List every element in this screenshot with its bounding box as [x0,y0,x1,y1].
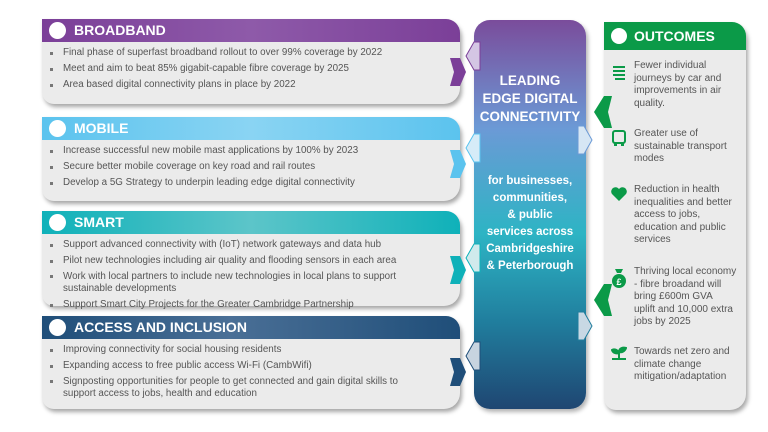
text: outcome 5: climate change [634,358,701,370]
text: outcome 1: journeys by car and [634,72,721,84]
text: outcome 4: - fibre broadand will [634,278,721,290]
heading: mobile [42,117,460,140]
panel: access and inclusion [42,316,460,409]
heading: outcomes: OUTCOMES [634,28,715,44]
text: mobile bullets: Increase successful new mobile mast applications by 100% by 2023 [63,145,358,156]
text: smart bullets: Support Smart City Projects for the Greater Cambridge Partnership [63,299,354,310]
text: broadband bullets: Meet and aim to beat 85% gigabit-capable fibre coverage by 2025 [63,63,349,74]
text: outcome 5 [634,346,730,382]
heading: access and inclusion [42,316,460,339]
text: broadband bullets: Final phase of superfast broadband rollout to over 99% coverage by 2022 [63,47,382,58]
arrows: left panels to center [450,42,480,386]
text: mobile bullets [50,145,358,188]
panel: broadband [42,19,460,104]
text: outcome 1: improvements in air [634,85,721,96]
text: outcome 3: access to jobs, [634,209,700,220]
icon: heart [611,187,627,201]
icon: bus [612,130,626,146]
text: broadband bullets [50,47,382,90]
text: access bullets [50,344,398,399]
text: audience: Cambridgeshire [486,243,574,255]
text: access bullets: Improving connectivity for social housing residents [63,344,281,355]
text: outcome 4 [634,266,736,327]
text: outcome 1: Fewer individual [634,60,706,71]
text: outcome 2: sustainable transport [634,140,727,152]
text: audience [486,175,574,272]
icon: plant [611,346,627,360]
text: outcome 2 [634,128,727,164]
text: outcome 1 [634,60,722,108]
text: smart bullets: Work with local partners to include new technologies in local plans to support sustainable developments [63,271,396,294]
text: audience: & public [507,209,553,221]
text: outcome 3 [634,184,732,245]
text: smart bullets: Pilot new technologies including air quality and flooding sensors in each area [63,255,396,266]
text: access bullets: Signposting opportunities for people to get connected and gain digital skills to support access to jobs, health and education [63,376,398,399]
text: outcome 3: inequalities and better [634,196,732,208]
heading: smart: SMART [74,214,124,230]
heading: leading edge: EDGE DIGITAL [482,91,578,106]
panel: outcomes [604,22,746,410]
panel: mobile [42,117,460,201]
text: outcome 3: Reduction in health [634,184,720,195]
heading: access and inclusion: ACCESS AND INCLUSION [74,319,247,335]
text: outcome 2: modes [634,153,664,164]
text: audience: for businesses, [488,175,572,187]
heading: broadband [42,19,460,42]
text: access bullets: Expanding access to free public access Wi-Fi (CambWifi) [63,360,312,371]
text: outcome 4: uplift and 10,000 extra [634,304,733,314]
text: audience: & Peterborough [487,260,573,272]
text: mobile bullets: Develop a 5G Strategy to underpin leading edge digital connectivity [63,177,355,188]
panel: smart [42,211,460,306]
text: outcome 4: jobs by 2025 [634,316,691,327]
text: outcome 5: mitigation/adaptation [634,371,726,382]
icon: money bag: £ [616,277,622,287]
text: outcome 2: Greater use of [634,128,698,139]
center column [474,20,586,409]
heading: mobile: MOBILE [74,120,128,136]
text: audience: communities, [493,192,567,204]
text: outcome 1: quality. [634,98,665,108]
heading: leading edge [480,73,580,124]
text: mobile bullets: Secure better mobile coverage on key road and rail routes [63,161,315,172]
heading: leading edge: LEADING [500,73,560,88]
heading: smart [42,211,460,234]
text: outcome 4: Thriving local economy [634,266,736,277]
text: outcome 3: education and public [634,222,726,232]
text: outcome 3: services [634,234,671,245]
heading: broadband: BROADBAND [74,22,166,38]
arrows: center to outcomes [578,96,612,340]
text: audience: services across [487,226,573,238]
text: broadband bullets: Area based digital connectivity plans in place by 2022 [63,79,296,90]
text: outcome 5: Towards net zero and [634,346,730,357]
text: smart bullets [50,239,396,310]
heading: outcomes [604,22,746,50]
icon: air [613,66,625,80]
text: outcome 4: bring £600m GVA [634,291,713,302]
text: smart bullets: Support advanced connectivity with (IoT) network gateways and data hub [63,239,381,250]
icon: money bag [612,269,626,288]
heading: leading edge: CONNECTIVITY [480,109,580,124]
